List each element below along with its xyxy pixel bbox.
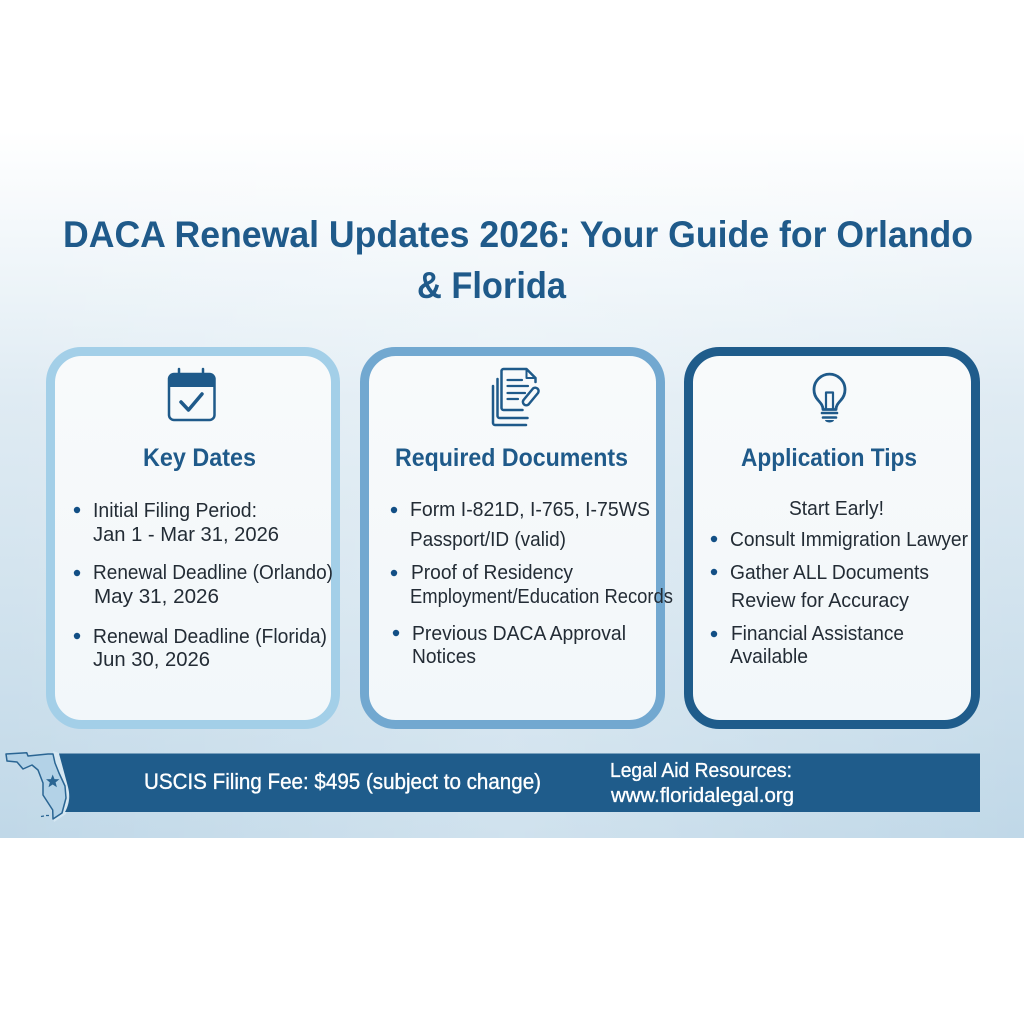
panel: application tips (688, 352, 976, 724)
list item: renewal deadline orlando (74, 561, 333, 608)
title: & Florida (417, 265, 566, 306)
background (0, 130, 1024, 838)
legal aid text (610, 759, 794, 807)
icon: light bulb (814, 374, 845, 422)
list item: forms and passport: Passport/ID (valid) (410, 528, 566, 551)
panel: required documents (364, 352, 673, 724)
list item: previous approval notices: Previous DACA Approval (412, 622, 626, 645)
list item: gather and review: Review for Accuracy (731, 589, 910, 612)
legal aid text: Legal Aid Resources: (610, 759, 792, 782)
tip: start early: Start Early! (789, 497, 884, 520)
heading: application tips: Application Tips (741, 444, 917, 472)
list item: renewal deadline florida (74, 625, 327, 671)
list item: financial assistance (711, 622, 904, 668)
banner: fee and legal aid (59, 754, 980, 812)
heading: required documents: Required Documents (395, 444, 628, 472)
list item: previous approval notices (393, 622, 626, 668)
list item: forms and passport (391, 498, 650, 551)
fee text: USCIS Filing Fee: $495 (subject to change) (144, 769, 541, 794)
list item: gather and review (711, 561, 929, 612)
list item: initial filing period: Jan 1 - Mar 31, 2026 (93, 523, 279, 546)
list item: residency and records (391, 561, 673, 608)
list item: renewal deadline orlando: May 31, 2026 (94, 585, 219, 608)
list item: residency and records: Proof of Residency (411, 561, 574, 584)
icon: calendar with check (168, 369, 215, 420)
list item: forms and passport: Form I-821D, I-765, I-75WS (410, 498, 650, 521)
list item: renewal deadline florida: Jun 30, 2026 (93, 648, 210, 671)
list item: financial assistance: Financial Assistance (731, 622, 904, 645)
list item: financial assistance: Available (730, 645, 808, 668)
icon: florida map with star (6, 751, 70, 822)
title: DACA Renewal Updates 2026: Your Guide for Orlando (63, 214, 973, 255)
list item: renewal deadline orlando: Renewal Deadline (Orlando) (93, 561, 333, 584)
icon: document stack with pen (493, 369, 539, 425)
heading: key dates: Key Dates (143, 444, 256, 472)
list item: initial filing period (74, 499, 279, 546)
title (63, 214, 973, 306)
list item: residency and records: Employment/Education Records (410, 585, 673, 608)
list item: gather and review: Gather ALL Documents (730, 561, 929, 584)
list item: initial filing period: Initial Filing Period: (93, 499, 257, 522)
legal aid text: www.floridalegal.org (610, 784, 794, 807)
list item: previous approval notices: Notices (412, 645, 476, 668)
panel: key dates (50, 352, 336, 724)
list item: consult lawyer: Consult Immigration Lawyer (730, 528, 968, 551)
list item: renewal deadline florida: Renewal Deadline (Florida) (93, 625, 327, 648)
